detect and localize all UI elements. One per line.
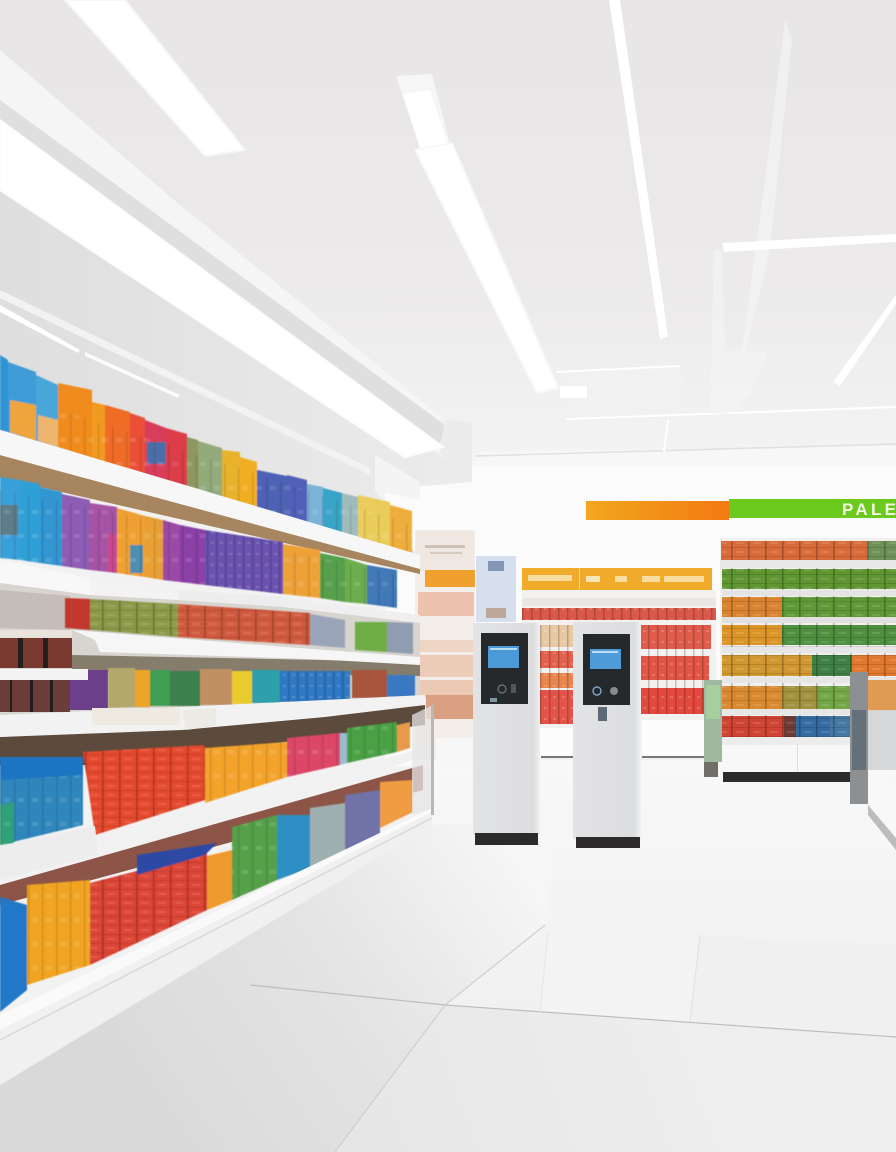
store sign	[586, 499, 896, 520]
kiosk left screen panel	[481, 633, 528, 704]
shelf row 2 lip	[0, 560, 420, 623]
blue promo sign	[476, 556, 516, 622]
ceiling light: centre	[396, 74, 587, 398]
floor	[0, 757, 896, 1152]
store sign: PALE	[842, 500, 896, 519]
bottom shelf front	[0, 808, 432, 1085]
ceiling	[0, 0, 896, 470]
narrow display post	[704, 680, 722, 777]
shelf row 1 lip	[0, 430, 420, 574]
shelf row 6 products	[0, 780, 413, 1012]
shelf row 3 products	[65, 598, 413, 654]
small side shelf products	[0, 630, 108, 712]
back wall	[385, 466, 896, 766]
shelf row 3 lip	[72, 630, 420, 665]
lower dark band	[0, 765, 423, 905]
shelf row 4 products	[108, 668, 415, 708]
right wall shelving	[720, 538, 896, 782]
gondola end post	[412, 705, 434, 815]
ceiling light: far right	[833, 295, 896, 386]
centre back shelf	[522, 568, 716, 760]
shelf row 5 products	[0, 722, 410, 845]
shelf row 1 products	[0, 355, 412, 554]
ceiling light: top left	[65, 0, 245, 156]
ceiling light: right cross	[722, 234, 896, 252]
kiosk right screen panel	[583, 634, 630, 721]
shelf row 4 lip	[0, 695, 425, 765]
ceiling light: right strip	[609, 0, 668, 339]
left gondola upper wall	[0, 50, 472, 560]
under-shelf interior	[0, 580, 420, 720]
right refrigerated case	[850, 672, 896, 850]
shelf row 2 products	[0, 477, 397, 608]
kiosk left	[473, 623, 540, 845]
kiosk right	[573, 622, 641, 848]
ceiling light: long left	[0, 120, 443, 457]
shelf row 5 lip	[0, 748, 423, 880]
far-left back shelf	[415, 530, 475, 770]
